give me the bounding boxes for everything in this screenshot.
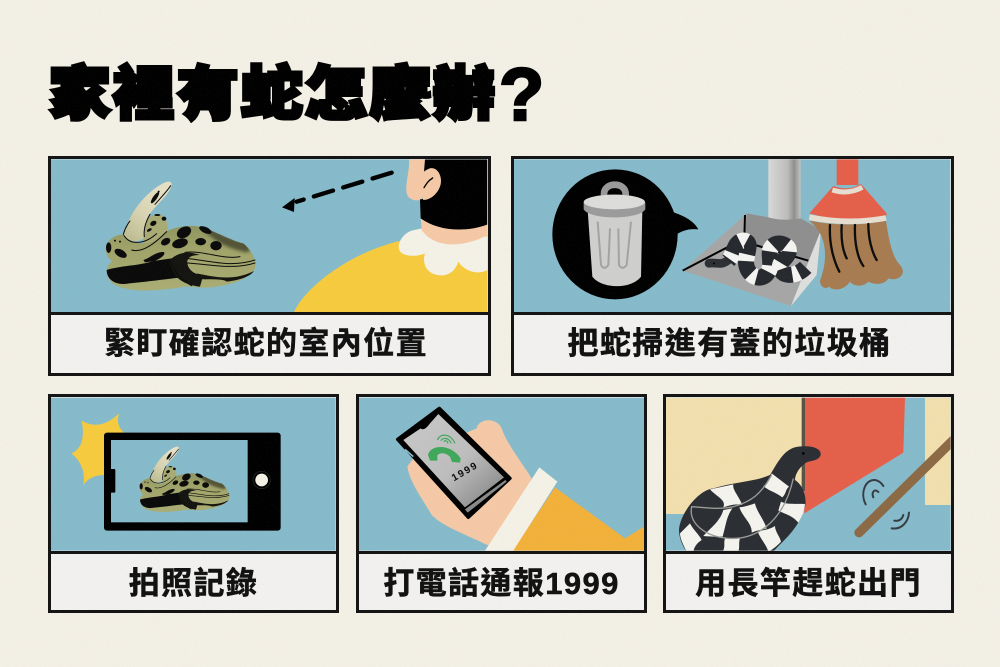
title: 家裡有蛇怎麼辦 <box>49 48 497 131</box>
vibration marks <box>863 480 909 529</box>
caption: 拍照記錄 <box>129 566 258 601</box>
hair <box>420 159 487 230</box>
illustration: bin, dustpan, broom <box>514 159 950 313</box>
banded snake in dustpan <box>709 241 806 278</box>
illustration: person watching snake <box>51 159 487 313</box>
caption: 打電話通報1999 <box>383 566 620 601</box>
illustration: phone photographing snake <box>51 398 336 551</box>
sweater <box>293 230 487 313</box>
caption: 緊盯確認蛇的室內位置 <box>104 326 428 361</box>
phone with call screen: 1999 <box>450 460 481 484</box>
title: ? <box>499 53 544 136</box>
caption: 用長竿趕蛇出門 <box>695 566 922 601</box>
phone with call screen <box>398 408 510 517</box>
divider <box>511 312 954 315</box>
red door <box>804 398 905 513</box>
panel: herd snake out <box>663 396 954 612</box>
panel: keep watching the snake <box>48 158 491 374</box>
illustration: hand holding phone <box>359 398 645 552</box>
divider <box>48 551 339 554</box>
broom <box>809 159 903 289</box>
banded krait <box>679 446 821 552</box>
sleeve <box>512 487 645 552</box>
illustration: snake, door and pole <box>666 398 953 552</box>
collar <box>399 228 487 275</box>
divider <box>48 312 491 315</box>
neck <box>421 217 487 244</box>
panel: call 1999 <box>356 396 647 612</box>
panel: sweep snake into bin <box>511 158 954 374</box>
divider <box>663 551 954 554</box>
cuff <box>484 467 557 552</box>
dustpan <box>683 159 821 306</box>
caption: 把蛇掃進有蓋的垃圾桶 <box>568 326 892 361</box>
hand <box>407 420 532 548</box>
pole <box>859 440 953 533</box>
camera flash <box>72 413 126 485</box>
divider <box>356 551 647 554</box>
icon: trash bin <box>584 185 645 286</box>
snake on screen <box>139 447 229 512</box>
snake <box>106 182 255 290</box>
speech bubble <box>552 169 698 299</box>
dashed sight arrow <box>282 173 392 212</box>
ear <box>421 168 441 200</box>
face <box>406 159 427 200</box>
wall <box>666 398 803 514</box>
phone <box>104 433 281 531</box>
panel: take a photo <box>48 396 339 612</box>
